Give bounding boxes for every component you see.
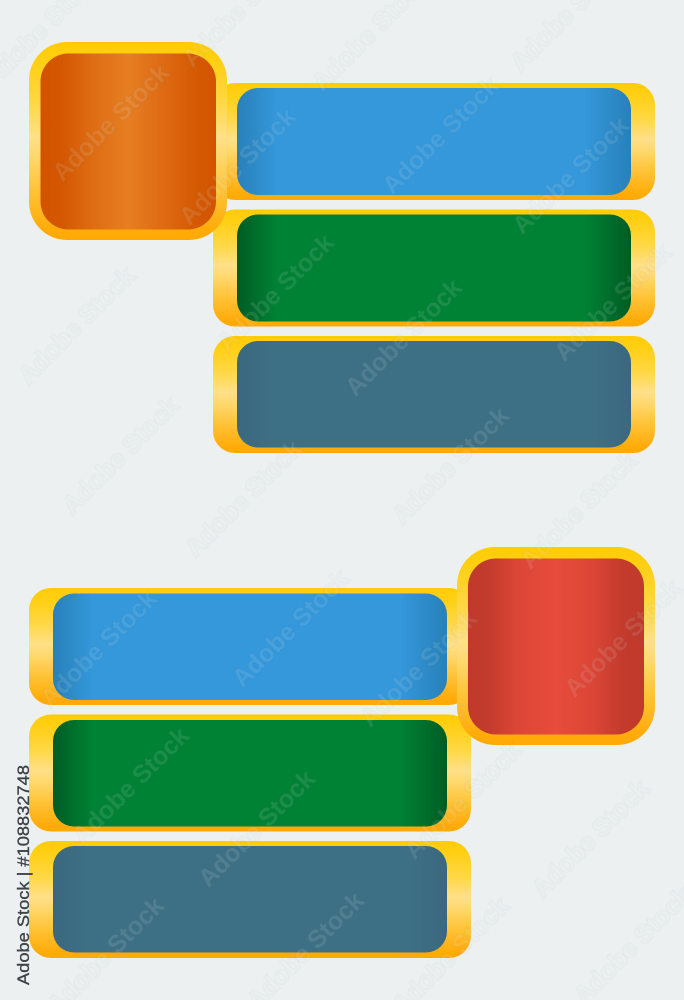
watermarks: Adobe Stock: [193, 765, 321, 893]
bottom green bar: [29, 714, 471, 832]
watermarks: Adobe Stock: [399, 737, 527, 865]
watermarks: Adobe Stock: [47, 59, 175, 187]
watermarks: Adobe Stock: [57, 392, 185, 520]
top slate bar: [213, 336, 655, 453]
watermarks: Adobe Stock: [377, 72, 505, 200]
panel: bottom group: [29, 547, 655, 958]
top blue bar: [213, 83, 655, 200]
watermarks: Adobe Stock: [174, 103, 302, 231]
watermarks: Adobe Stock: [515, 447, 643, 575]
watermarks: Adobe Stock: [35, 585, 163, 713]
red square tile: [457, 547, 655, 745]
watermarks: Adobe Stock: [387, 402, 515, 530]
watermarks: Adobe Stock: [340, 274, 468, 402]
watermarks: Adobe Stock: [227, 565, 355, 693]
watermarks: Adobe Stock: [180, 435, 308, 563]
side credit text: Adobe Stock | #108832748: [14, 765, 33, 985]
bottom slate bar: [29, 841, 471, 958]
watermarks: Adobe Stock: [507, 112, 635, 240]
watermarks: Adobe Stock: [13, 262, 141, 390]
watermarks: Adobe Stock: [355, 605, 483, 733]
orange square tile: [29, 42, 227, 240]
watermarks: Adobe Stock: [212, 229, 340, 357]
panel: top group: [29, 42, 655, 453]
top green bar: [213, 210, 655, 326]
bottom blue bar: [29, 588, 471, 705]
watermarks: Adobe Stock: [67, 722, 195, 850]
watermarks: Adobe Stock: [549, 239, 677, 367]
watermarks: Adobe Stock: [559, 575, 684, 703]
watermarks: Adobe Stock: [527, 775, 655, 903]
